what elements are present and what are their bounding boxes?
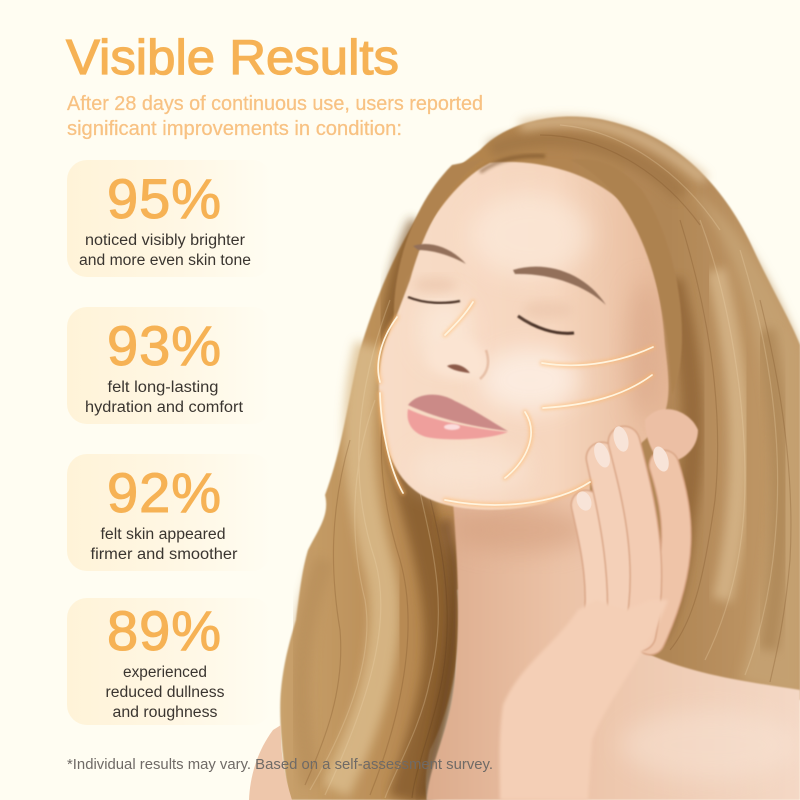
left shoulder	[249, 725, 292, 800]
stat card: 89%: and roughness	[112, 704, 218, 721]
stat card: 92%: felt skin appeared	[100, 526, 226, 543]
neck and chest	[427, 470, 800, 800]
fine hair strands	[305, 125, 791, 798]
stat card: 89%: experienced	[123, 664, 207, 681]
stat card: 92%: firmer and smoother	[90, 546, 238, 563]
stat card: 95%: noticed visibly brighter	[85, 232, 245, 249]
stat card: 92%: 92%	[107, 461, 221, 524]
hand	[500, 425, 676, 800]
stat card: 92%	[67, 454, 272, 571]
hair: back mass	[280, 116, 800, 800]
stat card: 93%: felt long-lasting	[108, 379, 218, 396]
stat card: 95%	[67, 160, 272, 277]
stat card: 93%: 93%	[107, 314, 221, 377]
subtitle: After 28 days of continuous use, users reported	[67, 93, 483, 115]
title: Visible Results	[66, 31, 399, 85]
stat card: 89%: reduced dullness	[106, 684, 225, 701]
stat card: 89%: 89%	[107, 599, 221, 662]
footnote: *Individual results may vary. Based on a self-assessment survey.	[67, 757, 493, 773]
hair framing the face	[394, 158, 486, 322]
palm and wrist	[500, 600, 668, 800]
lips	[407, 395, 508, 439]
eyes closed	[408, 277, 574, 333]
stat card: 93%	[67, 307, 272, 424]
stat card: 93%: hydration and comfort	[85, 399, 244, 416]
face	[379, 162, 669, 510]
portrait photo: woman with glowing skin	[249, 116, 800, 800]
subtitle: significant improvements in condition:	[67, 118, 402, 140]
ear	[645, 409, 698, 462]
stat card: 95%: 95%	[107, 167, 221, 230]
nose	[427, 336, 488, 380]
subtitle	[67, 93, 483, 140]
stat card: 95%: and more even skin tone	[79, 252, 251, 269]
stat card: 89%	[67, 598, 272, 725]
glowing contour lines	[378, 302, 653, 505]
eyebrows	[413, 244, 606, 305]
forehead and cheek highlights	[470, 193, 590, 277]
